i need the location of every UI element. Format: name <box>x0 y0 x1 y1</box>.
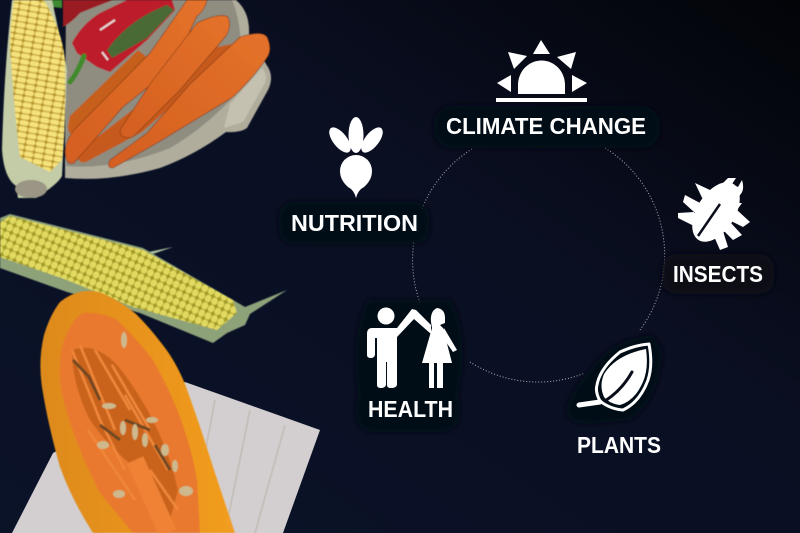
label: nutrition: NUTRITION <box>291 210 418 236</box>
photo: plate with carrots, peppers and corn <box>2 0 271 198</box>
node: health <box>356 300 462 432</box>
icon: rising sun <box>496 40 587 102</box>
corn stem <box>15 180 47 198</box>
photo: halved papaya <box>40 291 235 533</box>
back carrots <box>68 50 148 134</box>
node: plants <box>566 335 662 458</box>
photo: wooden board <box>12 382 320 533</box>
corn kernels <box>10 0 65 172</box>
node: nutrition <box>279 117 429 244</box>
node: insects <box>662 174 774 294</box>
icon: radish <box>325 117 387 198</box>
photo: horizontal corn cob <box>0 214 287 343</box>
icon: bug <box>678 174 750 250</box>
icon: leaf <box>579 344 651 410</box>
dotted cycle ring <box>413 148 665 382</box>
label: health: HEALTH <box>368 396 453 422</box>
label: plants: PLANTS <box>577 432 661 458</box>
label: insects: INSECTS <box>673 261 763 287</box>
corn husk <box>2 0 67 198</box>
label: climate change: CLIMATE CHANGE <box>446 113 646 139</box>
node: climate change <box>434 40 660 148</box>
icon: man and woman forming a roof <box>367 308 457 388</box>
peppers <box>63 0 113 27</box>
main carrots <box>65 0 207 164</box>
